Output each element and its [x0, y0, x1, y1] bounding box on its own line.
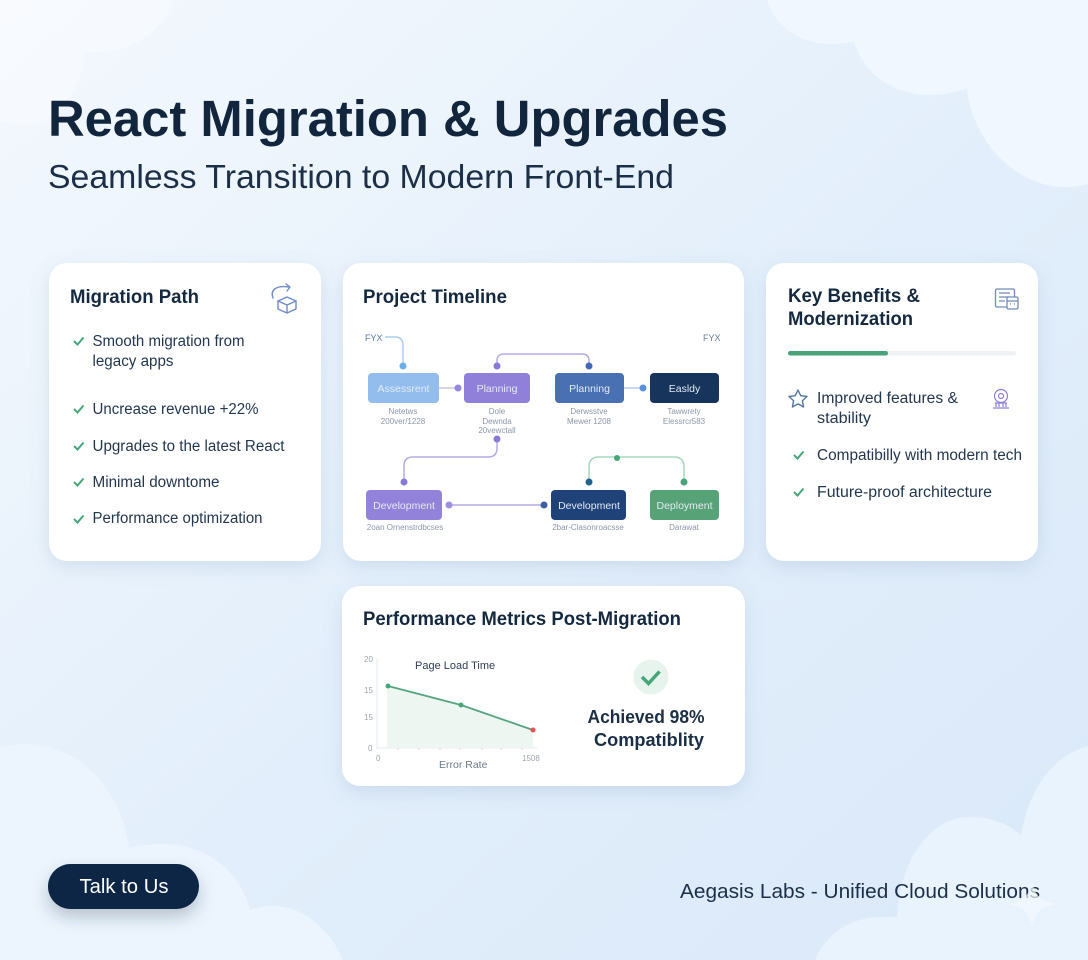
icon: document grid	[996, 289, 1018, 309]
step captions row 1: 200ver/1228	[381, 417, 426, 426]
icon: gauge	[993, 390, 1009, 408]
timeline connectors	[385, 337, 684, 505]
panel: performance metrics	[342, 586, 745, 786]
step: assessment: Assessrent	[378, 383, 430, 395]
chart: page load time: Error Rate	[439, 759, 488, 771]
step: development 2: Development	[558, 500, 620, 512]
icon: check badge	[634, 660, 668, 694]
title: React Migration & Upgrades	[48, 90, 728, 147]
step: development 1	[366, 490, 442, 520]
heading: migration path: Migration Path	[70, 287, 199, 308]
list: migration benefits: legacy apps	[92, 353, 174, 370]
step captions row 1: Mewer 1208	[567, 417, 612, 426]
step: deployment	[650, 490, 719, 520]
list: migration benefits: Performance optimization	[92, 510, 262, 527]
footer brand: Aegasis Labs - Unified Cloud Solutions	[680, 881, 1040, 903]
panel: key benefits	[766, 263, 1038, 561]
step: assessment	[368, 373, 439, 403]
chart: page load time: 0	[376, 754, 381, 763]
step captions row 2: 2bar-Clasonroacsse	[552, 523, 624, 532]
step captions row 1: Elessrcr583	[663, 417, 706, 426]
button: talk to us: Talk to Us	[80, 876, 168, 898]
chart: page load time: 15	[364, 686, 373, 695]
step: planning 2	[555, 373, 624, 403]
progress bar	[788, 351, 1016, 356]
step: development 1: Development	[373, 500, 435, 512]
step: development 2	[551, 490, 626, 520]
sparkle	[1008, 880, 1056, 928]
panel: project timeline	[343, 263, 744, 561]
heading: key benefits: Key Benefits &	[788, 286, 920, 307]
list: migration benefits: Upgrades to the latest React	[92, 438, 285, 455]
step captions row 1: 20vewctall	[478, 426, 516, 435]
step: deployment: Deployment	[656, 500, 713, 512]
step: easily	[650, 373, 719, 403]
heading: project timeline: Project Timeline	[363, 287, 507, 308]
step captions row 1: Netetws	[389, 407, 417, 416]
panel: migration path	[49, 263, 321, 561]
step captions row 1: Dole	[489, 407, 506, 416]
step captions row 2	[367, 523, 700, 532]
step captions row 1	[381, 407, 706, 435]
step captions row 2: Darawat	[669, 523, 700, 532]
stat: achieved compatibility	[588, 707, 704, 750]
stat: achieved compatibility: Compatiblity	[594, 730, 704, 750]
chart: page load time	[364, 655, 540, 771]
step: planning 2: Planning	[569, 383, 610, 395]
step: planning 1: Planning	[477, 383, 518, 395]
panel: key benefits: Modernization	[788, 309, 913, 330]
step captions row 2: 2oan Ornenstrdbcses	[367, 523, 443, 532]
chart: page load time: 0	[368, 744, 373, 753]
chart: page load time: 20	[364, 655, 373, 664]
button: talk to us	[48, 864, 199, 909]
step captions row 1: Tawwrety	[667, 407, 701, 416]
icon: box with arrow	[272, 284, 296, 313]
list: benefits: Future-proof architecture	[817, 484, 992, 501]
chart: page load time: 15	[364, 713, 373, 722]
list: benefits: Improved features &	[817, 390, 959, 407]
labels: FYX: FYX	[365, 333, 383, 343]
chart: page load time: 1508	[522, 754, 540, 763]
list: benefits	[794, 390, 1022, 501]
list: migration benefits: Smooth migration from	[92, 333, 244, 350]
list: migration benefits: Minimal downtome	[92, 474, 220, 491]
list: migration benefits	[74, 333, 285, 527]
list: migration benefits: Uncrease revenue +22%	[92, 401, 259, 418]
step: planning 1	[464, 373, 530, 403]
heading: performance metrics: Performance Metrics Post-Migration	[363, 609, 681, 630]
chart: page load time: Page Load Time	[415, 660, 495, 672]
subtitle: Seamless Transition to Modern Front-End	[48, 158, 674, 195]
step captions row 1: Dewnda	[482, 417, 512, 426]
icon: star	[789, 390, 807, 407]
panel: project timeline: FYX	[703, 333, 721, 343]
timeline nodes	[400, 362, 688, 508]
step: easily: Easldy	[669, 383, 701, 395]
list: benefits: Compatibilly with modern tech	[817, 447, 1022, 464]
stat: achieved compatibility: Achieved 98%	[588, 707, 704, 727]
list: benefits: stability	[817, 410, 871, 427]
step captions row 1: Derwsstve	[570, 407, 608, 416]
